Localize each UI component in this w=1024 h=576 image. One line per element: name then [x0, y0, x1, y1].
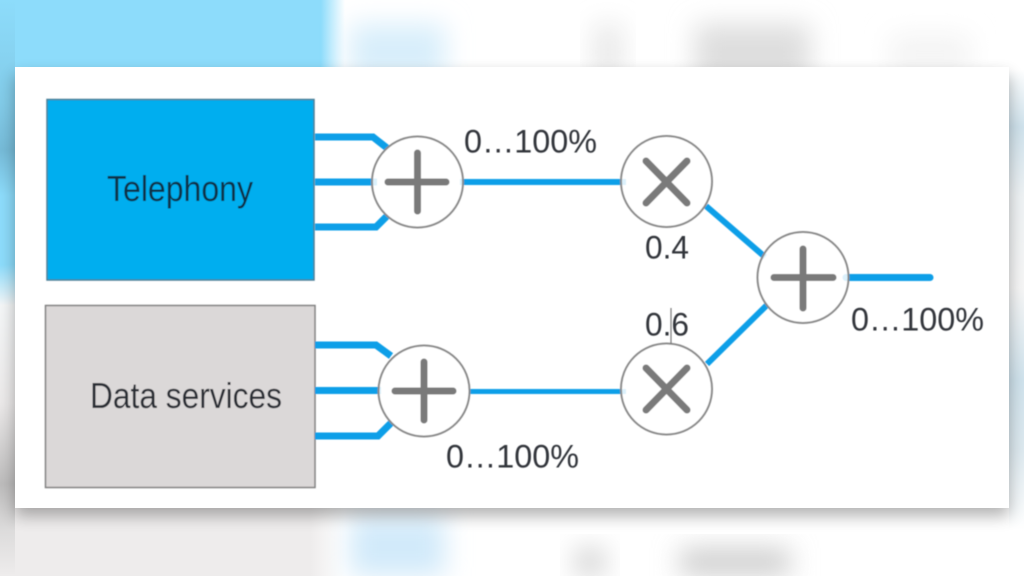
label: weight 0.4: 0.4 [645, 230, 689, 266]
icon: bottom multiplier [621, 344, 712, 434]
icon: top adder [372, 136, 463, 228]
telephony input lines [315, 137, 387, 227]
icon: output adder [758, 232, 848, 323]
data services input lines [315, 345, 391, 436]
label: output range: 0…100% [851, 302, 984, 338]
label: bottom adder range: 0…100% [446, 438, 579, 474]
connection: bottom adder to bottom multiplier [470, 389, 626, 394]
panel: data services box [46, 306, 315, 488]
icon: bottom adder [378, 346, 470, 436]
heading: data services: Data services [90, 375, 282, 416]
label: weight 0.6: 0.6 [645, 306, 689, 342]
heading: telephony: Telephony [107, 168, 253, 209]
panel: telephony box [47, 100, 314, 280]
output line [846, 274, 930, 281]
label: top adder range: 0…100% [464, 124, 597, 160]
connection: top multiplier to output adder [706, 206, 765, 257]
icon: top multiplier [621, 136, 712, 227]
connection: top adder to top multiplier [460, 179, 626, 185]
tick mark on 0.6 [670, 308, 672, 344]
connection: bottom multiplier to output adder [707, 305, 767, 364]
